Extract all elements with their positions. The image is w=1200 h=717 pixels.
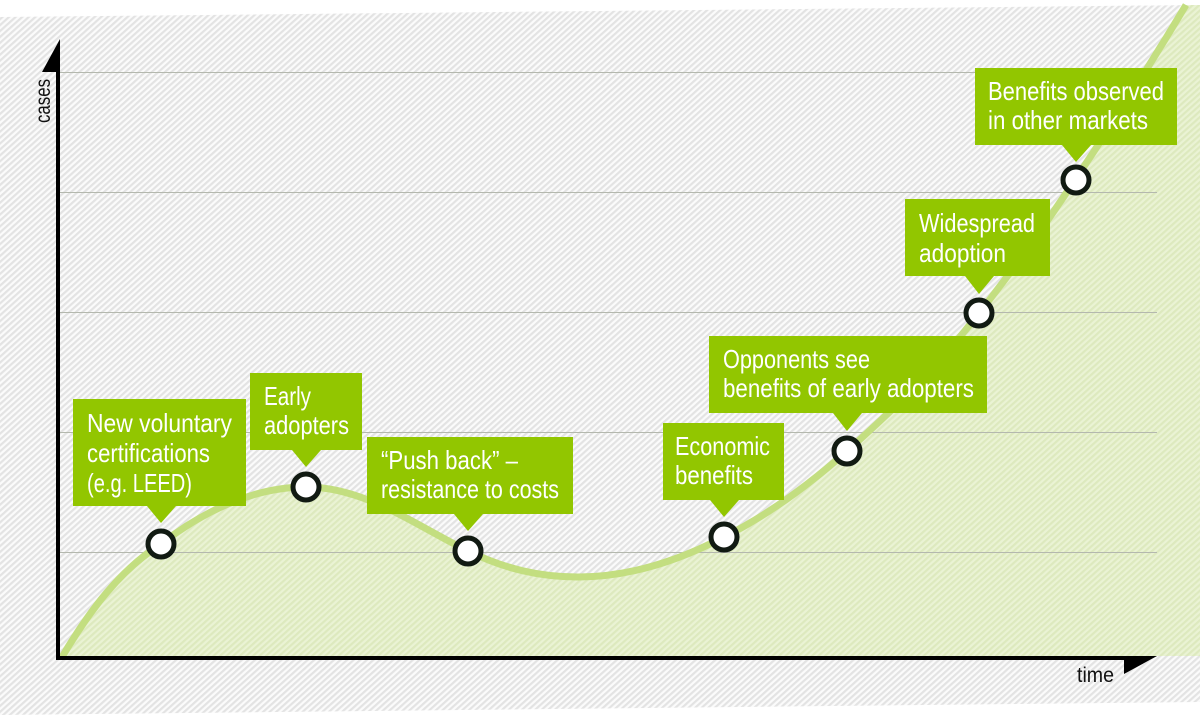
callout: opponents see benefits: benefits of early adopters [723,373,974,403]
callout: benefits in other markets [975,68,1177,162]
callout: early adopters: adopters [264,410,349,440]
marker: opponents see benefits [834,438,860,464]
callout: widespread adoption: adoption [919,238,1006,268]
callout: new voluntary certifications [73,399,246,523]
callout: economic benefits: benefits [675,460,753,490]
callout: opponents see benefits [709,336,987,431]
callout: widespread adoption [905,199,1050,294]
callout: economic benefits [663,423,784,517]
callout: early adopters: Early [264,381,311,411]
callout: opponents see benefits: Opponents see [723,344,870,374]
callout: early adopters [250,373,362,467]
marker: push back [455,538,481,564]
marker: widespread adoption [966,300,992,326]
callout: benefits in other markets: in other markets [988,105,1148,135]
axis label: cases: cases [32,79,55,123]
marker: benefits in other markets [1063,167,1089,193]
axis label: time: time [1077,664,1114,687]
callout: push back [367,437,573,531]
callout: new voluntary certifications: (e.g. LEED) [87,468,192,498]
callout: new voluntary certifications: New voluntary [87,408,232,438]
callout: push back: resistance to costs [381,474,559,504]
marker: new voluntary certifications [148,531,174,557]
grid lines [60,72,1157,552]
marker: early adopters [293,474,319,500]
callout: benefits in other markets: Benefits observed [988,76,1164,106]
marker: economic benefits [711,524,737,550]
callout: widespread adoption: Widespread [919,208,1035,238]
callout: push back: “Push back” – [381,445,518,475]
callout: new voluntary certifications: certifications [87,438,210,468]
callout: economic benefits: Economic [675,431,770,461]
